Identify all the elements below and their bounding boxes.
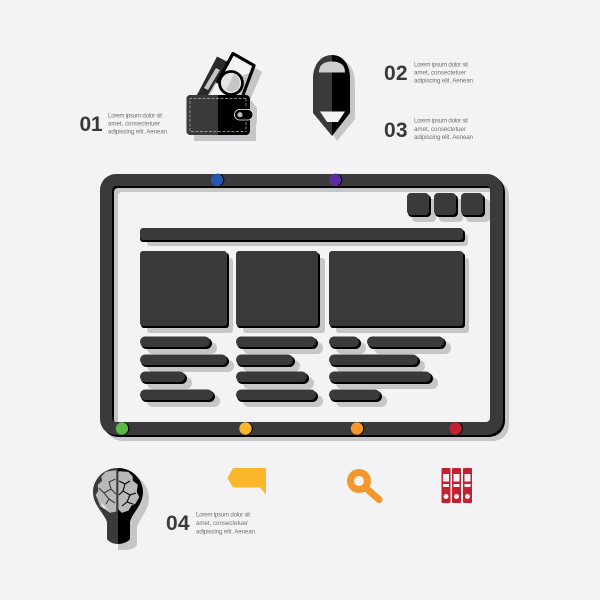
text block 02: amet, consectetuer bbox=[414, 70, 466, 76]
text block 03: 03 bbox=[384, 119, 408, 142]
bulb shadow bbox=[118, 474, 149, 550]
icon: wallet with banknotes bbox=[186, 53, 262, 141]
text block 01: Lorem ipsum dolor sit bbox=[108, 112, 162, 120]
image block 1 bbox=[140, 251, 233, 333]
text block 04: amet, consectetuer bbox=[196, 520, 248, 527]
text block 04: 04 bbox=[166, 512, 190, 535]
pencil cap bbox=[319, 62, 345, 72]
window frame bbox=[100, 174, 509, 441]
pencil right half bbox=[332, 55, 350, 136]
bulb right half bbox=[118, 468, 143, 544]
text block 02 bbox=[384, 62, 474, 85]
text block 03 bbox=[384, 118, 474, 142]
bulb left half bbox=[93, 468, 118, 544]
icon: magnifying glass bbox=[350, 472, 379, 500]
text lines column 1 bbox=[140, 336, 234, 407]
text block 03: adipiscing elit. Aenean bbox=[414, 134, 474, 141]
text block 03: amet, consectetuer bbox=[414, 126, 466, 133]
text block 02: adipiscing elit. Aenean bbox=[414, 78, 474, 84]
text block 04 bbox=[166, 512, 256, 536]
text block 02: 02 bbox=[384, 62, 408, 85]
panel: browser window bbox=[100, 174, 509, 441]
wallet clasp bbox=[234, 110, 253, 120]
pencil shadow bbox=[330, 60, 355, 141]
brain bbox=[96, 471, 138, 512]
address bar bbox=[140, 228, 468, 246]
window buttons bbox=[407, 193, 490, 222]
text lines column 2 bbox=[236, 336, 323, 407]
text block 01: 01 bbox=[80, 113, 103, 136]
text block 02: Lorem ipsum dolor sit bbox=[414, 62, 468, 68]
text block 01: adipiscing elit. Aenean bbox=[108, 128, 168, 136]
image block 2 bbox=[236, 251, 325, 333]
icon: binders bbox=[442, 468, 472, 503]
text block 01: amet, consectetuer bbox=[108, 120, 160, 128]
front banknote bbox=[210, 53, 254, 95]
wallet body bbox=[186, 95, 250, 135]
text block 03: Lorem ipsum dolor sit bbox=[414, 118, 468, 124]
image block 3 bbox=[329, 251, 469, 333]
icon: brain light bulb bbox=[93, 468, 149, 550]
icon: pencil bbox=[313, 55, 355, 141]
back banknote bbox=[197, 56, 228, 95]
text block 01 bbox=[80, 112, 168, 136]
pencil left half bbox=[313, 55, 332, 136]
pencil lower band bbox=[320, 112, 345, 122]
text block 04: adipiscing elit. Aenean bbox=[196, 528, 256, 536]
text block 04: Lorem ipsum dolor sit bbox=[196, 512, 250, 518]
text lines column 3 bbox=[329, 336, 451, 407]
wallet shadow bbox=[192, 59, 262, 141]
icon: speech bubble bbox=[228, 468, 266, 494]
frame dots bbox=[116, 174, 463, 435]
